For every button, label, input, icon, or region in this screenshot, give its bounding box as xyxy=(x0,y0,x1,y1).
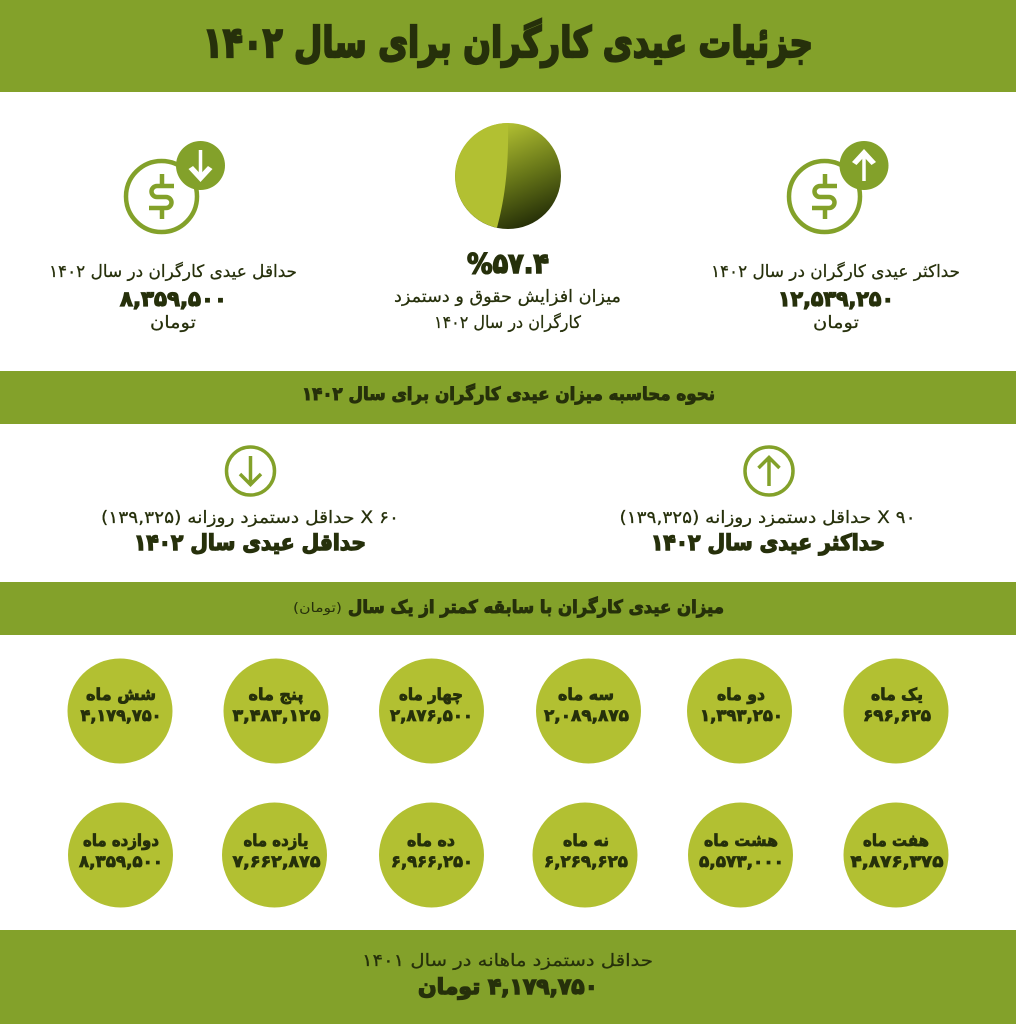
label: حداکثر عیدی کارگران در سال ۱۴۰۲ xyxy=(711,261,960,282)
circle: twelve months: ۸,۳۵۹,۵۰۰ xyxy=(79,852,163,871)
formula: ۶۰ X حداقل دستمزد روزانه (۱۳۹,۳۲۵) xyxy=(101,508,399,528)
circle: three months: ۲,۰۸۹,۸۷۵ xyxy=(544,706,629,725)
circle: one month: یک ماه xyxy=(871,685,923,704)
circle: five months: ۳,۴۸۳,۱۲۵ xyxy=(232,706,320,725)
section heading: bonus by months worked xyxy=(0,582,1016,635)
circle: nine months: ۶,۲۶۹,۶۲۵ xyxy=(544,852,628,871)
circle: three months: سه ماه xyxy=(558,685,614,704)
circle: eleven months: ۷,۶۶۲,۸۷۵ xyxy=(232,852,320,871)
icon: coin with down arrow xyxy=(126,141,225,232)
title band xyxy=(0,0,1016,92)
circle: four months: ۲,۸۷۶,۵۰۰ xyxy=(390,706,473,725)
percentage: %۵۷.۴ xyxy=(467,247,549,280)
circle: eight months: ۵,۵۷۳,۰۰۰ xyxy=(699,852,784,871)
circle: one month: ۶۹۶,۶۲۵ xyxy=(863,706,931,725)
circle: twelve months xyxy=(68,802,173,908)
footer band: monthly minimum wage: ۴,۱۷۹,۷۵۰ تومان xyxy=(418,975,598,1000)
pie chart xyxy=(455,123,561,229)
circle: eleven months: یازده ماه xyxy=(244,831,308,850)
section heading: calculation method: نحوه محاسبه میزان عیدی کارگران برای سال ۱۴۰۲ xyxy=(302,383,715,405)
footer band: monthly minimum wage xyxy=(0,930,1016,1024)
circle: six months: شش ماه xyxy=(86,685,156,704)
unit: تومان xyxy=(150,313,196,333)
unit: تومان xyxy=(813,313,859,333)
circle: nine months xyxy=(532,802,638,908)
formula: ۹۰ X حداقل دستمزد روزانه (۱۳۹,۳۲۵) xyxy=(620,508,916,528)
footer band: monthly minimum wage: حداقل دستمزد ماهانه در سال ۱۴۰۱ xyxy=(362,951,653,971)
amount: ۸,۳۵۹,۵۰۰ xyxy=(120,287,227,311)
circle: ten months: ده ماه xyxy=(407,831,455,850)
circle: eight months: هشت ماه xyxy=(704,831,778,850)
circle: seven months: هفت ماه xyxy=(863,831,929,850)
label: حداقل عیدی کارگران در سال ۱۴۰۲ xyxy=(49,261,297,282)
circle: seven months xyxy=(844,802,948,908)
circle: six months: ۴,۱۷۹,۷۵۰ xyxy=(80,706,162,725)
section heading: calculation method xyxy=(0,371,1016,424)
panel: maximum bonus xyxy=(711,141,960,333)
circle: twelve months: دوازده ماه xyxy=(83,831,159,851)
title band: جزئیات عیدی کارگران برای سال ۱۴۰۲ xyxy=(203,18,813,68)
icon: coin with up arrow xyxy=(789,141,888,232)
circle: two months xyxy=(687,658,792,764)
panel: maximum formula xyxy=(620,447,916,556)
circle: nine months: نه ماه xyxy=(563,831,609,850)
icon: down arrow circle xyxy=(226,447,274,495)
description line two: کارگران در سال ۱۴۰۲ xyxy=(434,312,582,333)
circle: seven months: ۴,۸۷۶,۳۷۵ xyxy=(850,852,944,871)
circle: eight months xyxy=(688,802,793,908)
circle: four months xyxy=(379,658,484,764)
formula title: حداقل عیدی سال ۱۴۰۲ xyxy=(134,531,366,556)
circle: two months: دو ماه xyxy=(717,685,765,705)
panel: wage increase xyxy=(394,123,621,333)
circle: four months: چهار ماه xyxy=(399,685,463,705)
circle: six months xyxy=(68,658,172,764)
section heading: bonus by months worked: میزان عیدی کارگران با سابقه کمتر از یک سال xyxy=(348,596,724,618)
section heading: bonus by months worked: (تومان) xyxy=(293,601,342,616)
circle: one month xyxy=(844,658,948,764)
circle: ten months: ۶,۹۶۶,۲۵۰ xyxy=(391,852,473,871)
circle: five months xyxy=(224,658,328,764)
circle: five months: پنج ماه xyxy=(248,685,304,705)
panel: minimum formula xyxy=(101,447,399,556)
panel: minimum bonus xyxy=(49,141,297,333)
circle: eleven months xyxy=(222,802,327,908)
circle: three months xyxy=(536,658,641,764)
formula title: حداکثر عیدی سال ۱۴۰۲ xyxy=(651,531,885,556)
icon: up arrow circle xyxy=(745,447,793,495)
circle: two months: ۱,۳۹۳,۲۵۰ xyxy=(700,706,783,725)
amount: ۱۲,۵۳۹,۲۵۰ xyxy=(778,287,894,311)
circle: ten months xyxy=(379,802,484,908)
description line one: میزان افزایش حقوق و دستمزد xyxy=(394,287,621,307)
